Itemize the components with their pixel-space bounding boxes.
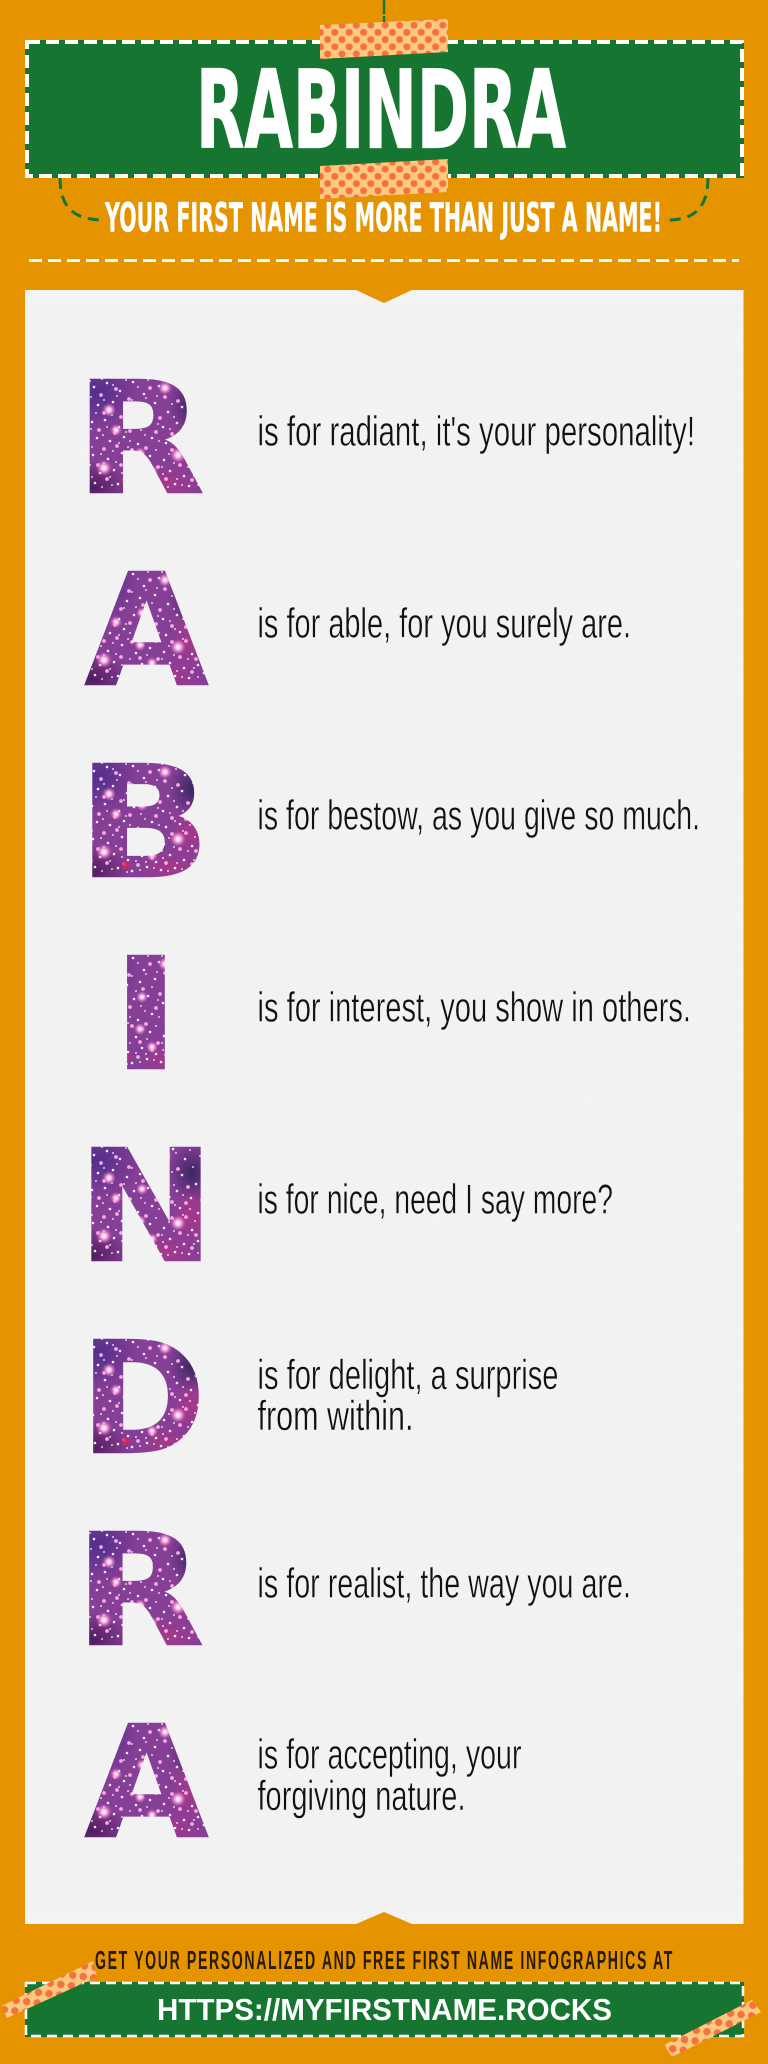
text D: is for delight, a surprise xyxy=(258,1351,558,1398)
footer url banner xyxy=(25,1982,744,2037)
letter N: N xyxy=(77,1116,215,1298)
row N xyxy=(77,1116,613,1298)
tape: below title xyxy=(320,159,448,199)
letter A: A xyxy=(84,540,209,722)
letter I: I xyxy=(110,924,182,1106)
top hanging string xyxy=(383,0,385,24)
tape: top xyxy=(320,19,448,59)
dashed divider xyxy=(29,259,739,262)
tape: bottom right xyxy=(664,2000,761,2057)
text N: is for nice, need I say more? xyxy=(258,1176,613,1222)
row R xyxy=(75,348,695,530)
row I xyxy=(110,924,691,1106)
title banner xyxy=(25,40,744,178)
row R second xyxy=(74,1500,631,1682)
connector curve: left xyxy=(60,178,103,220)
letter D: D xyxy=(80,1308,206,1490)
row A xyxy=(84,540,631,722)
connector curve: right xyxy=(669,178,708,220)
text D line 2: from within. xyxy=(258,1392,414,1439)
letter R: R xyxy=(74,1500,204,1682)
tape: bottom left xyxy=(2,1961,97,2018)
letter R: R xyxy=(75,348,205,530)
row B xyxy=(77,732,700,914)
text A line 2: forgiving nature. xyxy=(258,1772,466,1819)
row A second xyxy=(84,1692,522,1874)
letter A: A xyxy=(84,1692,209,1874)
panel: letters xyxy=(25,290,744,1924)
letter B: B xyxy=(77,732,211,914)
row D xyxy=(80,1308,558,1490)
url: HTTPS://MYFIRSTNAME.ROCKS xyxy=(157,1993,612,2027)
text A: is for accepting, your xyxy=(258,1730,522,1778)
